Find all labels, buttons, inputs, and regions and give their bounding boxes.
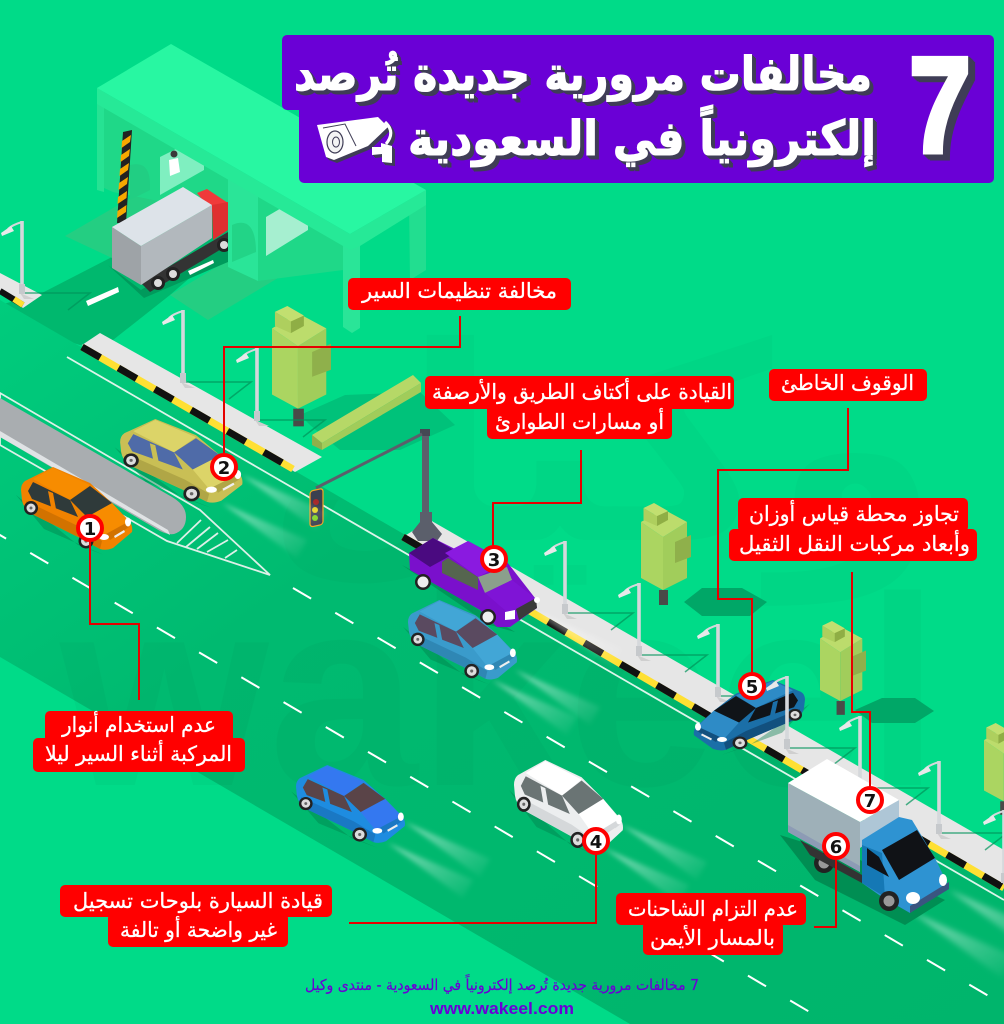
callout 4: قيادة السيارة بلوحات تسجيل	[73, 889, 323, 913]
road edge line	[67, 357, 1004, 900]
title line two: إلكترونياً في السعودية	[408, 104, 876, 167]
icon: camera	[317, 117, 392, 163]
booth wall left	[104, 100, 228, 215]
lamp two	[162, 310, 251, 399]
sidewalk upper	[82, 333, 322, 472]
lamp eleven	[983, 810, 1004, 899]
badge 4: 4	[590, 832, 602, 853]
green bar	[312, 375, 421, 450]
arch left	[130, 164, 150, 200]
main road	[0, 300, 1004, 1024]
callout 3	[425, 376, 734, 439]
toll plaza	[65, 44, 426, 333]
median	[0, 393, 270, 575]
callout 6: عدم التزام الشاحنات	[628, 897, 798, 921]
pillar left	[97, 88, 104, 192]
lamp six	[697, 624, 786, 713]
badge 6	[824, 834, 848, 858]
title panel	[282, 29, 994, 183]
lamp ten	[918, 761, 1004, 850]
tree shadow three	[855, 698, 934, 723]
badge 5: 5	[746, 677, 758, 698]
connector lines	[90, 316, 870, 927]
callout 1	[33, 711, 245, 772]
bright blue car	[291, 765, 405, 848]
roof face	[97, 88, 426, 250]
title number: 7	[909, 29, 971, 181]
sidewalk short left	[0, 273, 42, 308]
median hatch	[177, 520, 237, 558]
footer source line: 7 مخالفات مرورية جديدة تُرصد إلكترونياً في السعودية - منتدى وكيل	[305, 974, 699, 995]
headlight beams	[222, 475, 1004, 978]
booth right window	[266, 207, 308, 256]
badge 3	[482, 547, 506, 571]
curb short left	[0, 291, 23, 305]
tree one	[272, 306, 331, 426]
orange car	[16, 467, 132, 555]
white suv	[509, 760, 623, 855]
callout 2	[348, 278, 571, 310]
toll road	[0, 188, 228, 345]
curb upper	[82, 347, 293, 469]
traffic light	[310, 429, 442, 541]
blue box truck	[780, 759, 949, 925]
pillar middle	[228, 170, 258, 281]
footer website: www.wakeel.com	[429, 999, 574, 1018]
callout 6: بالمسار الأيمن	[650, 925, 775, 950]
callout 3: القيادة على أكتاف الطريق والأرصفة	[432, 378, 732, 404]
badge 7: 7	[864, 791, 876, 812]
yellow car	[115, 419, 242, 508]
hazard post	[117, 130, 132, 223]
light blue car	[403, 600, 517, 684]
shadow: green bar and tree one	[300, 392, 455, 450]
grey truck	[86, 187, 231, 306]
badge 2: 2	[218, 458, 230, 479]
badge 1	[78, 516, 102, 540]
lamp three	[236, 348, 325, 437]
platform left	[65, 175, 228, 258]
platform right	[170, 222, 328, 320]
lamp nine	[839, 716, 928, 805]
curb lower	[403, 537, 1004, 888]
callout 7: وأبعاد مركبات النقل الثقيل	[739, 530, 970, 556]
callout 1: المركبة أثناء السير ليلا	[45, 740, 232, 766]
purple pickup	[402, 538, 540, 632]
title line one: مخالفات مرورية جديدة تُرصد	[294, 47, 872, 102]
badge 7	[858, 788, 882, 812]
booth window with attendant	[160, 147, 204, 195]
lamp one	[1, 221, 90, 310]
tree shadow two	[684, 588, 767, 616]
curb yellow end	[14, 299, 23, 305]
badge 1: 1	[84, 519, 96, 540]
callout 2: مخالفة تنظيمات السير	[361, 279, 557, 303]
callout 6	[616, 893, 806, 955]
callout 4	[60, 885, 332, 947]
arch middle	[232, 223, 256, 262]
callout 7: تجاوز محطة قياس أوزان	[749, 500, 959, 526]
lamp four	[544, 541, 633, 630]
tree four	[984, 723, 1004, 815]
callout 5	[769, 369, 927, 401]
callout 7	[729, 498, 977, 561]
callout 3: أو مسارات الطوارئ	[495, 408, 664, 434]
pillar front right	[343, 236, 360, 333]
tree two	[641, 503, 691, 605]
pillar far right	[409, 190, 426, 280]
lamp seven	[766, 676, 855, 765]
lamp five	[618, 583, 707, 672]
badge 2	[212, 455, 236, 479]
roof top	[97, 44, 426, 234]
callout 4: غير واضحة أو تالفة	[120, 916, 277, 942]
badge 5	[740, 674, 764, 698]
badge 4	[584, 829, 608, 853]
tree three	[820, 621, 866, 715]
callout 1: عدم استخدام أنوار	[61, 711, 216, 737]
callout 5: الوقوف الخاطئ	[781, 371, 914, 395]
badge 6: 6	[830, 837, 842, 858]
lane dashes	[0, 528, 1004, 1024]
sidewalk lower	[403, 520, 1004, 888]
dark blue parked car	[694, 680, 810, 755]
badge 3: 3	[488, 550, 500, 571]
booth right wall	[258, 193, 343, 281]
